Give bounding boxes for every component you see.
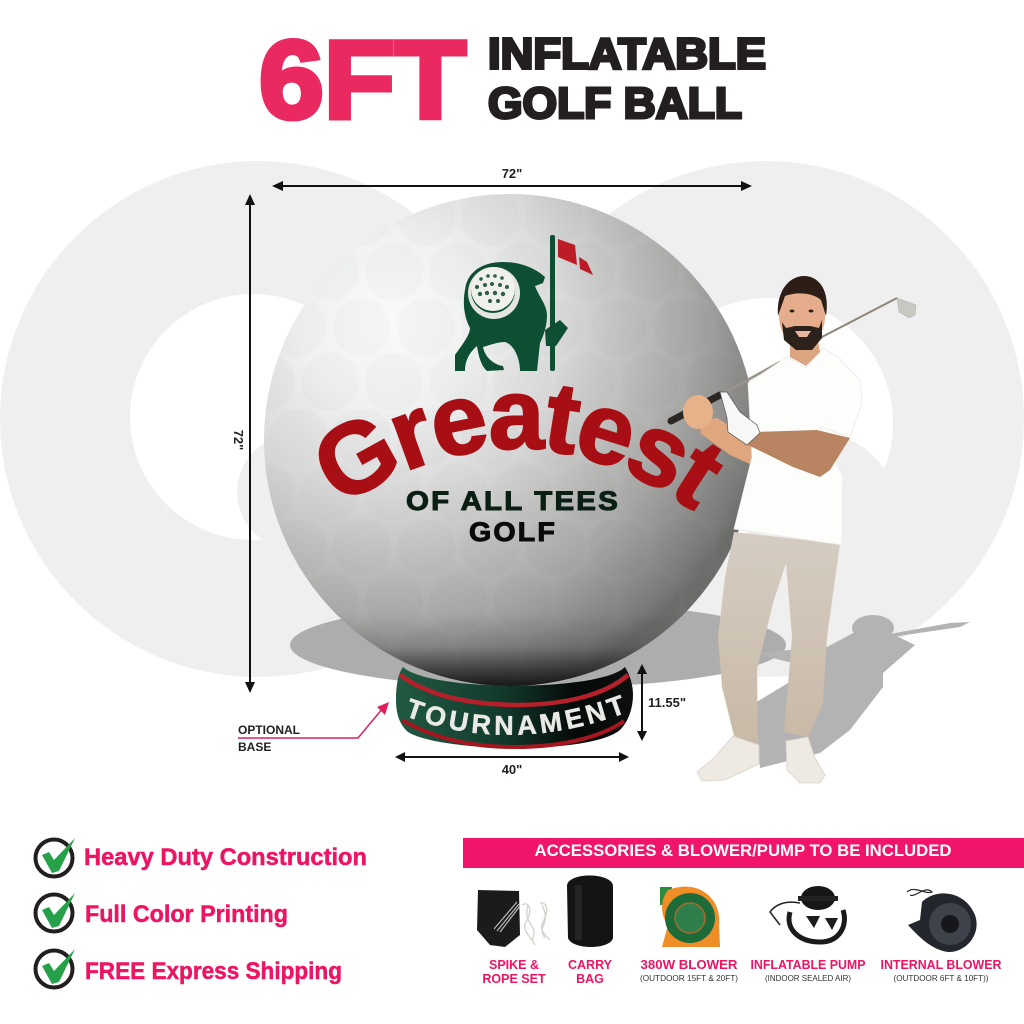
title: inflatable golf ball xyxy=(488,30,766,128)
label: inflatable pump: INFLATABLE PUMP xyxy=(750,958,866,972)
check item 1: Heavy Duty Construction xyxy=(84,844,367,871)
dimension: height 72: 72" xyxy=(231,430,246,450)
check item 2 xyxy=(36,893,288,932)
left arm xyxy=(700,418,753,465)
callout: optional base: BASE xyxy=(238,740,271,754)
dimension: base height 11.55: 11.55" xyxy=(648,695,686,710)
checklist xyxy=(36,838,367,988)
shirt xyxy=(734,348,862,545)
hair xyxy=(778,276,827,316)
check item 3 xyxy=(36,949,342,988)
callout: optional base: OPTIONAL xyxy=(238,723,300,737)
icon: spike and rope set xyxy=(477,890,550,947)
label: carry bag: BAG xyxy=(576,972,604,986)
title: inflatable golf ball: INFLATABLE xyxy=(488,30,766,78)
golf club xyxy=(671,298,916,421)
accessories banner xyxy=(463,838,1024,868)
icon: 380W blower xyxy=(660,887,720,947)
brand line: golf: GOLF xyxy=(469,517,557,547)
dimension: base width 40 xyxy=(395,752,629,777)
shoes xyxy=(697,736,759,781)
label: carry bag: CARRY xyxy=(568,958,613,972)
glove xyxy=(720,392,760,445)
callout: optional base xyxy=(238,702,389,754)
label: internal blower: INTERNAL BLOWER xyxy=(880,958,1002,972)
label: spike and rope set: SPIKE & xyxy=(489,958,539,972)
dimension: width 72: 72" xyxy=(502,166,522,181)
hand on grip xyxy=(683,395,713,429)
label: 380W blower: (OUTDOOR 15FT & 20FT) xyxy=(640,973,738,983)
label: 380W blower: 380W BLOWER xyxy=(640,958,738,972)
label: spike and rope set: ROPE SET xyxy=(482,972,546,986)
icon: inflatable pump xyxy=(770,886,844,942)
neck xyxy=(790,340,820,366)
check item 1 xyxy=(36,838,367,876)
label: inflatable pump xyxy=(750,958,866,983)
brand line: of all tees: OF ALL TEES xyxy=(406,486,620,516)
label: inflatable pump: (INDOOR SEALED AIR) xyxy=(765,973,851,983)
dimension: height 72 xyxy=(231,194,255,693)
title: inflatable golf ball: GOLF BALL xyxy=(488,79,742,128)
brand word: Greatest: Greatest xyxy=(318,386,723,511)
head xyxy=(779,286,825,346)
base: tournament xyxy=(396,667,633,749)
check item 3: FREE Express Shipping xyxy=(85,958,342,985)
check item 2: Full Color Printing xyxy=(85,901,288,928)
forearm xyxy=(748,430,850,477)
dimension: width 72 xyxy=(272,166,752,191)
label: 380W blower xyxy=(640,958,738,983)
beard xyxy=(782,320,822,350)
label: internal blower xyxy=(880,958,1002,983)
trousers xyxy=(718,532,840,744)
base lettering: TOURNAMENT xyxy=(409,694,622,736)
background rings xyxy=(0,161,1024,677)
golf ball xyxy=(264,194,756,686)
man's shadow xyxy=(753,615,970,768)
accessories banner: ACCESSORIES & BLOWER/PUMP TO BE INCLUDED xyxy=(534,841,952,860)
eyes xyxy=(790,310,814,312)
dimension: base width 40: 40" xyxy=(502,762,522,777)
logo: mascot with flag xyxy=(455,235,593,371)
label: internal blower: (OUTDOOR 6FT & 10FT)) xyxy=(894,973,989,983)
title: 6FT: 6FT xyxy=(259,19,466,142)
icon: internal blower xyxy=(907,889,977,952)
man with golf club xyxy=(671,276,916,783)
dimension: base height 11.55 xyxy=(637,664,686,741)
ground shadow of ball xyxy=(290,602,786,688)
icon: carry bag xyxy=(567,876,613,947)
